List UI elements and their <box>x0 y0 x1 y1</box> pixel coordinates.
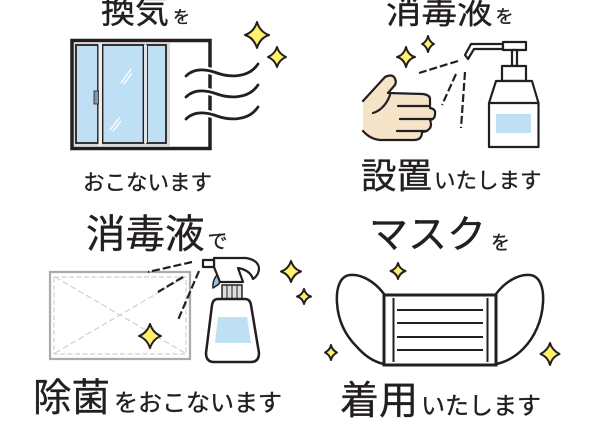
text: sanitizer action: 設置いたします <box>361 156 542 196</box>
icon: mask <box>337 275 543 365</box>
icon: sparkles <box>325 263 560 365</box>
icon: surface <box>50 272 190 359</box>
icon: spray lines <box>419 61 465 128</box>
icon: spray bottle <box>203 258 259 362</box>
icon: sparkles <box>281 261 311 304</box>
icon: pump bottle <box>465 42 538 147</box>
icon: hand <box>363 76 435 140</box>
heading: disinfect: 消毒液で <box>86 213 228 257</box>
text: disinfect action: 除菌をおこないます <box>33 377 282 420</box>
panel: ventilation <box>72 0 286 195</box>
panel: mask <box>325 214 560 423</box>
panel: disinfecting <box>33 213 311 420</box>
icon: sparkles <box>397 36 434 67</box>
heading: particle: を <box>491 233 510 254</box>
icon: air waves <box>186 64 258 119</box>
icon: spray lines <box>148 262 199 320</box>
heading: mask: マスク <box>369 214 486 257</box>
icon: sparkles <box>245 22 286 67</box>
icon: window <box>72 40 210 148</box>
icon: sparkle <box>139 324 161 348</box>
panel: hand sanitizer <box>361 0 542 196</box>
text: ventilation action: おこないます <box>83 171 212 195</box>
text: mask action: 着用いたします <box>340 380 541 423</box>
